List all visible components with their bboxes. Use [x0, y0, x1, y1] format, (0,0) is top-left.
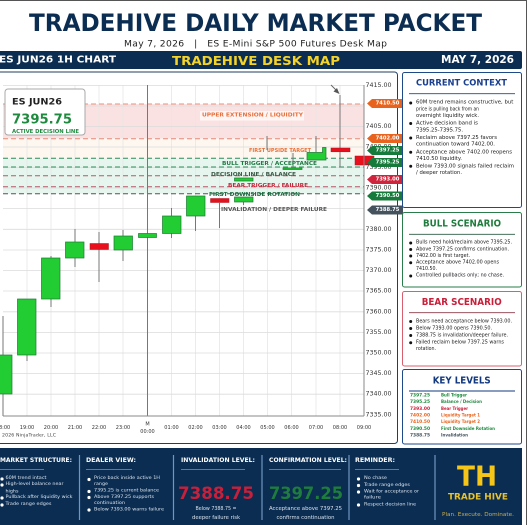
- context bullets: continuation toward 7402.00.: [416, 142, 495, 148]
- price axis labels: 7360.00: [366, 308, 392, 315]
- key levels table: 7390.50: [410, 426, 430, 432]
- time axis labels: 22:00: [92, 425, 106, 431]
- bull bullets: 7410.50.: [416, 266, 437, 272]
- key levels table: 7393.00: [410, 406, 430, 412]
- tag 7388.75: 7388.75: [376, 207, 400, 213]
- time axis labels: 08:00: [333, 425, 347, 431]
- key levels table: 7395.25: [410, 399, 430, 405]
- footer: market structure: High-level balance near: [6, 481, 64, 487]
- footer: confirmation level: CONFIRMATION LEVEL:: [269, 458, 347, 464]
- tag 7402.00: 7402.00: [376, 136, 400, 142]
- context heading: CURRENT CONTEXT: [416, 78, 508, 88]
- footer: reminder: [355, 458, 419, 508]
- context bullets: price is pulling back from an: [416, 106, 479, 112]
- panel: footer: [0, 448, 522, 525]
- price axis labels: 7405.00: [366, 123, 392, 130]
- footer: confirmation level: Acceptance above 7397.25: [269, 506, 342, 512]
- tag 7393.00: 7393.00: [376, 176, 400, 182]
- time axis labels: 21:00: [68, 425, 82, 431]
- invalidation number: 7388.75: [178, 483, 254, 503]
- key levels heading: KEY LEVELS: [433, 376, 491, 386]
- footer: confirmation level: [269, 458, 347, 521]
- zone labels: [200, 111, 327, 213]
- footer: reminder: REMINDER:: [355, 458, 395, 464]
- bear bullets: Failed reclaim below 7397.25 warns: [416, 340, 504, 346]
- context bullets: Active decision band is: [416, 120, 478, 126]
- footer: invalidation level: deeper failure risk: [192, 515, 241, 521]
- price axis labels: 7375.00: [366, 246, 392, 254]
- time axis labels: 01:00: [164, 425, 179, 431]
- footer: dealer view: range: [94, 481, 108, 487]
- time axis labels: 00:00: [140, 429, 155, 435]
- key levels table: Bull Trigger: [441, 392, 468, 398]
- level lines: [3, 104, 364, 194]
- context bullets: 7395.25-7395.75.: [416, 127, 463, 133]
- context bullets: Acceptance above 7402.00 reopens: [416, 149, 512, 155]
- panel: price chart: [0, 72, 403, 444]
- label: first upside target: FIRST UPSIDE TARGET: [249, 148, 311, 154]
- footer: reminder: Respect decision line: [364, 502, 416, 508]
- bear bullets: [409, 318, 512, 352]
- key levels table: Liquidity Target 1: [441, 412, 480, 418]
- context bullets: / deeper rotation.: [416, 170, 462, 176]
- time axis labels: 04:00: [236, 425, 251, 431]
- price axis labels: 7345.00: [366, 370, 392, 377]
- chart zones: [3, 104, 364, 194]
- header: desk map title: TRADEHIVE DESK MAP: [172, 53, 340, 68]
- key levels table: [410, 392, 495, 438]
- label: first downside rotation: FIRST DOWNSIDE ROTATION: [209, 192, 300, 198]
- price axis labels: 7340.00: [366, 391, 392, 398]
- label: bull trigger: BULL TRIGGER / ACCEPTANCE: [222, 161, 317, 167]
- footer: reminder: No chase: [364, 475, 387, 481]
- header bar: [0, 51, 522, 69]
- time axis labels: 02:00: [188, 425, 203, 431]
- label: upper extension: UPPER EXTENSION / LIQUIDITY: [202, 112, 304, 118]
- axis lines: [3, 85, 364, 416]
- time axis labels: [0, 422, 371, 435]
- confirmation number: 7397.25: [269, 483, 343, 503]
- arrow: wick pointer: [331, 85, 340, 94]
- footer: dealer view: [86, 458, 164, 512]
- logo wordmark: TRADE HIVE: [448, 492, 508, 502]
- time axis labels: 03:00: [212, 425, 227, 431]
- key levels table: 7397.25: [410, 392, 430, 398]
- label: invalidation: INVALIDATION / DEEPER FAILURE: [221, 207, 327, 213]
- time axis labels: 23:00: [116, 425, 130, 431]
- title: TRADEHIVE DAILY MARKET PACKET: [29, 9, 483, 37]
- panel: key levels: [402, 370, 522, 444]
- time axis labels: M: [145, 422, 150, 428]
- key levels table: Liquidity Target 2: [441, 419, 480, 425]
- bear bullets: Below 7393.00 opens 7390.50.: [416, 325, 492, 331]
- footer: dealer view: continuation: [94, 500, 125, 506]
- footer: reminder: Wait for acceptance or: [364, 488, 419, 494]
- footer: dealer view: Below 7393.00 warns failure: [94, 506, 164, 512]
- footer: market structure: 60M trend intact: [6, 475, 47, 481]
- context bullets: overnight liquidity wick.: [416, 113, 479, 119]
- time axis labels: 19:00: [20, 425, 34, 431]
- price axis labels: 7380.00: [366, 226, 392, 233]
- key levels table: 7388.75: [410, 432, 430, 438]
- price axis labels: 7355.00: [366, 329, 392, 336]
- footer: market structure: Pullback after liquidity wick: [6, 494, 73, 500]
- label: bear trigger: BEAR TRIGGER / FAILURE: [228, 183, 308, 189]
- price axis labels: 7395.00: [366, 164, 392, 171]
- context bullets: 7410.50 liquidity.: [416, 156, 462, 162]
- candlesticks: [0, 85, 374, 416]
- price axis labels: 7350.00: [366, 350, 392, 356]
- bull bullets: Acceptance above 7402.00 opens: [416, 260, 499, 266]
- panel: bull scenario: [402, 212, 522, 287]
- footer: invalidation level: INVALIDATION LEVEL:: [181, 458, 255, 464]
- footer: market structure: [0, 458, 73, 507]
- price axis labels: 7390.00: [366, 184, 392, 192]
- key levels table: Balance / Decision: [441, 399, 482, 405]
- tag 7397.25: 7397.25: [376, 148, 400, 154]
- tag 7390.50: 7390.50: [376, 193, 400, 199]
- bull heading: BULL SCENARIO: [423, 218, 501, 230]
- price axis labels: 7400.00: [366, 144, 392, 150]
- key levels table: Bear Trigger: [441, 406, 469, 412]
- card symbol: ES JUN26: [12, 98, 62, 108]
- price tags: [367, 99, 403, 214]
- key levels table: First Downside Rotation: [441, 426, 495, 432]
- bull bullets: Bulls need hold/reclaim above 7395.25.: [416, 240, 512, 246]
- bear bullets: Bears need acceptance below 7393.00.: [416, 318, 512, 324]
- price card: [5, 89, 85, 135]
- bull bullets: 7402.00 is first target.: [416, 253, 470, 259]
- key levels table: 7402.00: [410, 412, 430, 418]
- card price: 7395.75: [12, 112, 72, 128]
- card note: ACTIVE DECISION LINE: [12, 129, 79, 135]
- time axis labels: 07:00: [309, 425, 323, 431]
- price axis labels: 7365.00: [366, 288, 392, 294]
- footer: dealer view: 7395.25 is current balance: [94, 488, 159, 494]
- subtitle: May 7, 2026 | ES E-Mini S&P 500 Futures Desk Map: [124, 38, 387, 50]
- key levels table: 7410.50: [410, 419, 430, 425]
- footer: reminder: Trade range edges: [363, 482, 411, 488]
- context bullets: Below 7393.00 signals failed reclaim: [416, 163, 514, 169]
- bull bullets: [409, 240, 512, 279]
- footer: dealer view: Above 7397.25 supports: [94, 494, 155, 500]
- footer: dealer view: DEALER VIEW:: [86, 458, 136, 464]
- logo tagline: Plan. Execute. Dominate.: [442, 512, 514, 518]
- price axis labels: 7370.00: [366, 267, 392, 274]
- footer: confirmation level: confirms continuation: [276, 515, 334, 521]
- time axis labels: 09:00: [357, 425, 371, 431]
- label: decision line: DECISION LINE / BALANCE: [211, 172, 296, 178]
- footer: invalidation level: [178, 458, 255, 521]
- bull bullets: Controlled pullbacks only; no chase.: [416, 273, 504, 279]
- logo: trade hive: [442, 460, 514, 518]
- footer: invalidation level: Below 7388.75 =: [196, 506, 236, 512]
- time axis labels: 06:00: [284, 425, 299, 431]
- header: date: MAY 7, 2026: [441, 54, 514, 66]
- context bullets: 60M trend remains constructive, but: [416, 100, 513, 106]
- footer: market structure: Trade range edges: [4, 501, 52, 507]
- footer: reminder: failure: [364, 494, 381, 500]
- panel: bear scenario: [402, 292, 522, 366]
- bear bullets: rotation.: [416, 346, 436, 352]
- time axis labels: 05:00: [260, 425, 275, 431]
- price axis labels: 7335.00: [366, 412, 392, 418]
- footer: market structure: MARKET STRUCTURE:: [0, 458, 72, 464]
- tag 7410.50: 7410.50: [376, 100, 400, 106]
- key levels table: Invalidation: [441, 432, 468, 438]
- bear bullets: 7388.75 is invalidation/deeper failure.: [416, 332, 508, 338]
- time axis labels: 20:00: [44, 425, 58, 431]
- footer: market structure: highs: [6, 488, 19, 494]
- price axis labels: 7415.00: [366, 82, 392, 89]
- context bullets: [409, 100, 514, 176]
- footer: dealer view: Price back inside active 1H: [94, 475, 160, 481]
- tag 7395.25: 7395.25: [376, 160, 400, 166]
- bear heading: BEAR SCENARIO: [422, 297, 502, 308]
- context bullets: Reclaim above 7397.25 favors: [416, 135, 497, 141]
- logo: trade hive: TH: [457, 460, 497, 492]
- header: chart name: ES JUN26 1H CHART: [0, 54, 116, 66]
- bull bullets: Above 7397.25 confirms continuation.: [416, 246, 509, 252]
- price axis labels: [366, 82, 392, 418]
- panel: current context: [402, 72, 522, 208]
- copyright: 2026 NinjaTrader, LLC: [2, 432, 57, 438]
